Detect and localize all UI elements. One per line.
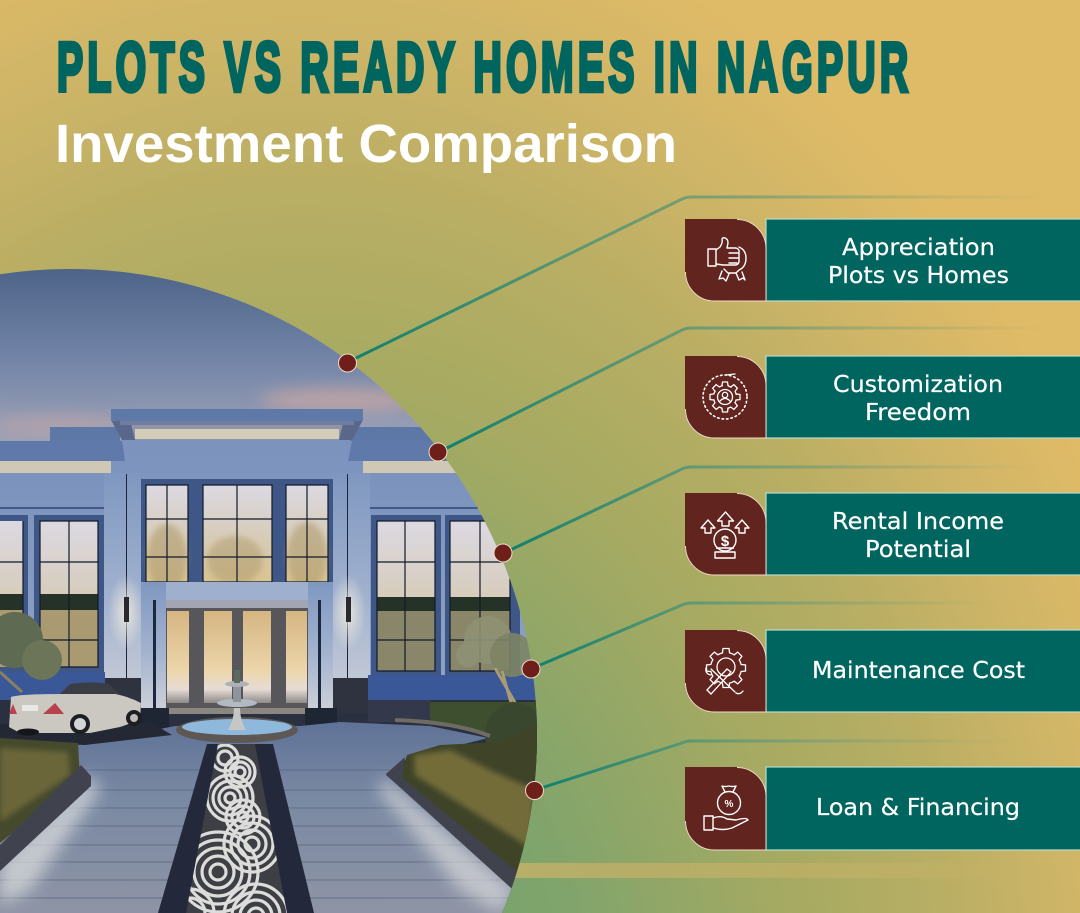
curved curb — [395, 720, 490, 736]
label: appreciation plots vs homes — [828, 235, 1009, 289]
icon: money with up arrows: $ — [721, 533, 730, 550]
subtitle: Investment Comparison — [55, 114, 677, 174]
icon: money with up arrows — [701, 512, 749, 558]
parked white car — [9, 682, 142, 736]
photo: luxury home at dusk in a circular crop — [0, 260, 560, 913]
mosaic path — [186, 744, 287, 913]
connector dot 5 — [526, 782, 544, 800]
connector dot 2 — [429, 443, 447, 461]
ground base — [0, 700, 560, 913]
connector 2 — [441, 328, 1060, 451]
central upper windows — [141, 479, 333, 592]
label: customization freedom: Freedom — [865, 400, 971, 426]
side windows — [0, 515, 520, 675]
connector dot 4 — [522, 660, 540, 678]
left hedge — [0, 738, 91, 871]
paving stripes — [0, 770, 560, 898]
title: PLOTS VS READY HOMES IN NAGPUR — [57, 29, 908, 107]
card: appreciation — [685, 219, 1080, 301]
building walls — [0, 440, 545, 708]
card: customization — [685, 356, 1080, 438]
garden lawn and shrubs — [430, 702, 537, 755]
blue base band — [0, 672, 538, 722]
right hedge — [386, 742, 537, 888]
car shadow — [0, 722, 172, 745]
icon: hand holding percent bag: % — [725, 799, 734, 810]
label: loan and financing: Loan & Financing — [816, 795, 1020, 821]
label: rental income potential: Potential — [865, 537, 971, 563]
connector 3 — [506, 467, 1040, 552]
driveway light glow — [0, 775, 515, 913]
pillar bases — [140, 708, 337, 728]
driveway — [0, 722, 520, 913]
label: rental income potential: Rental Income — [832, 509, 1004, 535]
connector dot 1 — [338, 354, 356, 372]
label: maintenance cost: Maintenance Cost — [812, 658, 1025, 684]
connector dot 3 — [494, 544, 512, 562]
wall lamps — [108, 574, 366, 650]
pink dusk clouds — [0, 388, 420, 434]
label: customization freedom: Customization — [833, 372, 1003, 398]
connector 4 — [533, 603, 1000, 668]
roof slabs — [0, 409, 475, 473]
central stone path — [158, 744, 314, 913]
connector 5 — [538, 741, 1020, 789]
icon: thumbs up badge — [708, 238, 746, 281]
trees — [0, 612, 534, 706]
entrance portal — [141, 582, 333, 714]
label: appreciation plots vs homes: Plots vs Homes — [828, 263, 1009, 289]
sky — [0, 269, 467, 490]
label: appreciation plots vs homes: Appreciation — [842, 235, 995, 261]
icon: gear with wrench and screwdriver — [706, 648, 746, 694]
card: loan and financing — [685, 767, 1080, 850]
connector 1 — [350, 197, 1060, 361]
card: rental income — [685, 493, 1080, 575]
label: customization freedom — [833, 372, 1003, 426]
decorative lower band — [500, 863, 1080, 878]
icon: gear with person and dotted ring — [703, 374, 747, 419]
icon: hand holding percent bag — [704, 786, 748, 830]
card: maintenance cost — [685, 630, 1080, 712]
label: rental income potential — [832, 509, 1004, 563]
fountain — [176, 670, 298, 743]
